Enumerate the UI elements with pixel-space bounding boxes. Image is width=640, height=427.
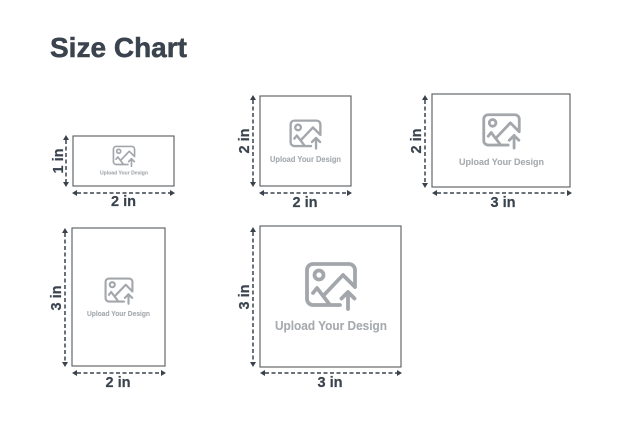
height arrow 2x1	[63, 135, 69, 187]
height label 2x3: 3 in	[49, 286, 65, 310]
panel: 3x2 in	[409, 94, 572, 211]
icon: upload image 3x2	[484, 115, 519, 148]
width arrow 3x3	[260, 370, 402, 376]
width label 3x3: 3 in	[318, 375, 342, 391]
icon: upload image 2x1	[113, 146, 135, 166]
title: Size Chart	[50, 32, 187, 63]
width arrow 2x2	[259, 190, 352, 196]
width arrow 2x3	[72, 370, 166, 376]
height label 3x3: 3 in	[237, 285, 253, 309]
upload text 3x3: Upload Your Design	[275, 319, 387, 333]
upload text 2x3: Upload Your Design	[87, 311, 150, 318]
panel: 2x1 in	[51, 135, 175, 210]
upload text 2x2: Upload Your Design	[270, 155, 341, 164]
width label 2x2: 2 in	[293, 195, 317, 211]
width label 2x1: 2 in	[111, 194, 136, 210]
width label 3x2: 3 in	[491, 195, 515, 211]
width label 2x3: 2 in	[106, 375, 130, 391]
panel: 2x2 in	[237, 95, 352, 211]
card: 2x2	[260, 96, 351, 186]
upload text 3x2: Upload Your Design	[459, 157, 544, 168]
card: 3x3	[260, 226, 401, 367]
height label 3x2: 2 in	[409, 129, 425, 153]
upload text 2x1: Upload Your Design	[100, 170, 149, 176]
icon: upload image 2x3	[106, 279, 132, 304]
panel: 3x3 in	[237, 226, 402, 391]
card: 2x1	[73, 136, 174, 186]
width arrow 3x2	[432, 190, 572, 196]
height arrow 2x2	[250, 95, 256, 187]
icon: upload image 3x3	[307, 264, 355, 309]
height arrow 2x3	[62, 228, 68, 367]
height arrow 3x3	[250, 227, 256, 367]
card: 3x2	[432, 94, 570, 187]
card: 2x3	[72, 228, 165, 366]
icon: upload image 2x2	[291, 121, 320, 149]
height label 2x2: 2 in	[237, 129, 253, 153]
height label 2x1: 1 in	[51, 149, 67, 173]
width arrow 2x1	[72, 190, 175, 196]
height arrow 3x2	[422, 95, 428, 188]
panel: 2x3 in	[49, 228, 166, 391]
